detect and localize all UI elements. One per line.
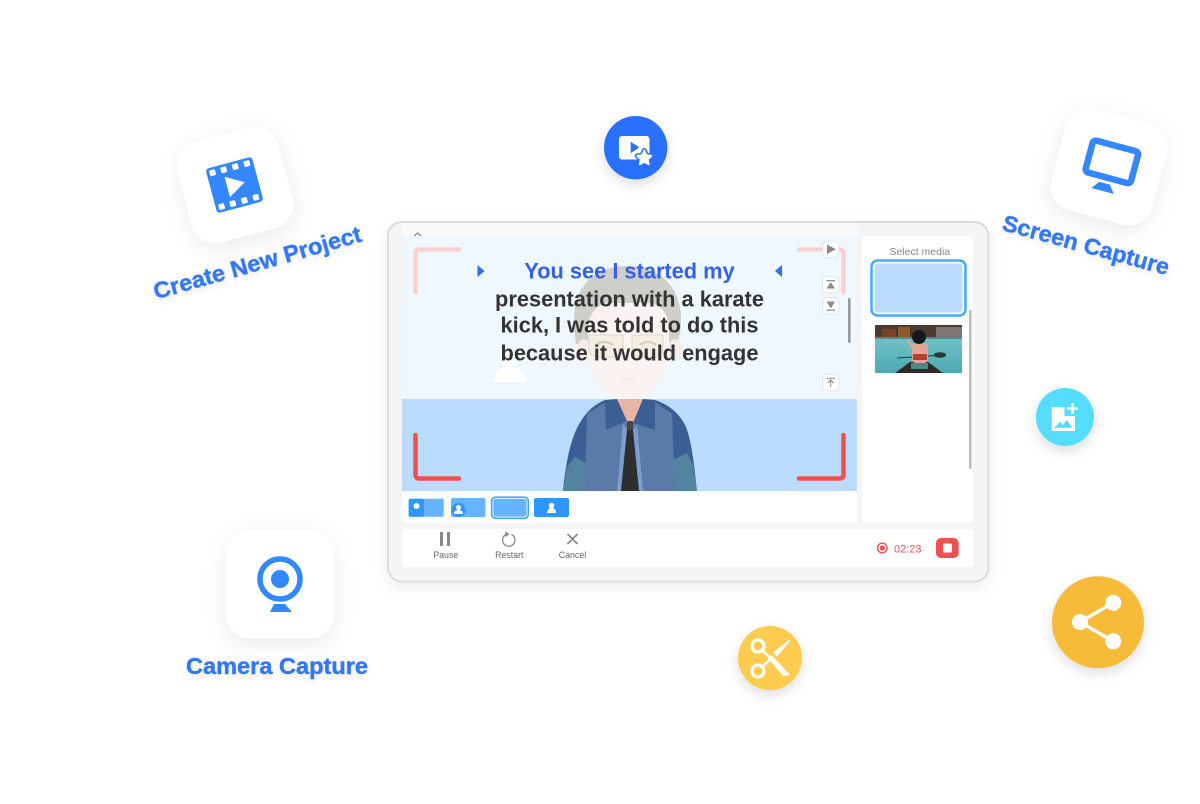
card: create new project [171, 121, 299, 249]
teleprompter controls [822, 241, 851, 391]
button: cut [738, 626, 802, 690]
layout thumbnails [409, 497, 569, 518]
control: restart: Restart [495, 550, 524, 560]
control: pause [433, 532, 458, 560]
label: camera capture: Camera Capture [186, 653, 368, 679]
button: share [1052, 576, 1144, 668]
card: camera capture [226, 530, 334, 638]
preview scrollbar [848, 298, 851, 343]
text width markers [478, 265, 782, 277]
teleprompter text: because it would engage [500, 340, 758, 366]
media scrollbar [969, 310, 972, 469]
recording timer [878, 543, 922, 556]
icon: collapse chevron [412, 233, 423, 238]
teleprompter text: presentation with a karate [495, 286, 764, 312]
placeholder person icon [493, 349, 526, 382]
button: add media [1036, 388, 1094, 446]
teleprompter text [495, 258, 764, 366]
app window [388, 222, 988, 582]
panel: control bar [402, 529, 973, 567]
icon: film strip [205, 157, 264, 213]
panel: preview area [402, 223, 857, 523]
label: create new project: Create New Project [150, 221, 365, 304]
stop button [936, 538, 959, 558]
control: cancel: Cancel [559, 550, 586, 560]
card: screen capture [1045, 103, 1173, 231]
icon: webcam [260, 559, 300, 612]
icon: monitor [1081, 140, 1139, 197]
illustrated presenter [563, 266, 697, 491]
icon: share nodes [1072, 595, 1121, 649]
panel: media list [862, 236, 973, 523]
teleprompter text: kick, I was told to do this [501, 312, 758, 338]
icon: image plus [1052, 403, 1078, 431]
label: screen capture: Screen Capture [1000, 210, 1172, 280]
icon: scissors [752, 640, 790, 677]
kayak photo thumbnail [874, 324, 962, 374]
recording timer: 02:23 [894, 544, 922, 556]
teleprompter text: You see I started my [524, 258, 735, 284]
button: featured video [604, 116, 667, 179]
recording frame corners [416, 250, 844, 478]
selected media thumbnail [872, 260, 966, 316]
control: restart [495, 532, 524, 560]
icon: video with star [619, 136, 652, 164]
infographic canvas [154, 116, 1169, 698]
control: pause: Pause [433, 550, 458, 560]
control: cancel [559, 534, 586, 560]
panel: media list: Select media [889, 246, 950, 258]
